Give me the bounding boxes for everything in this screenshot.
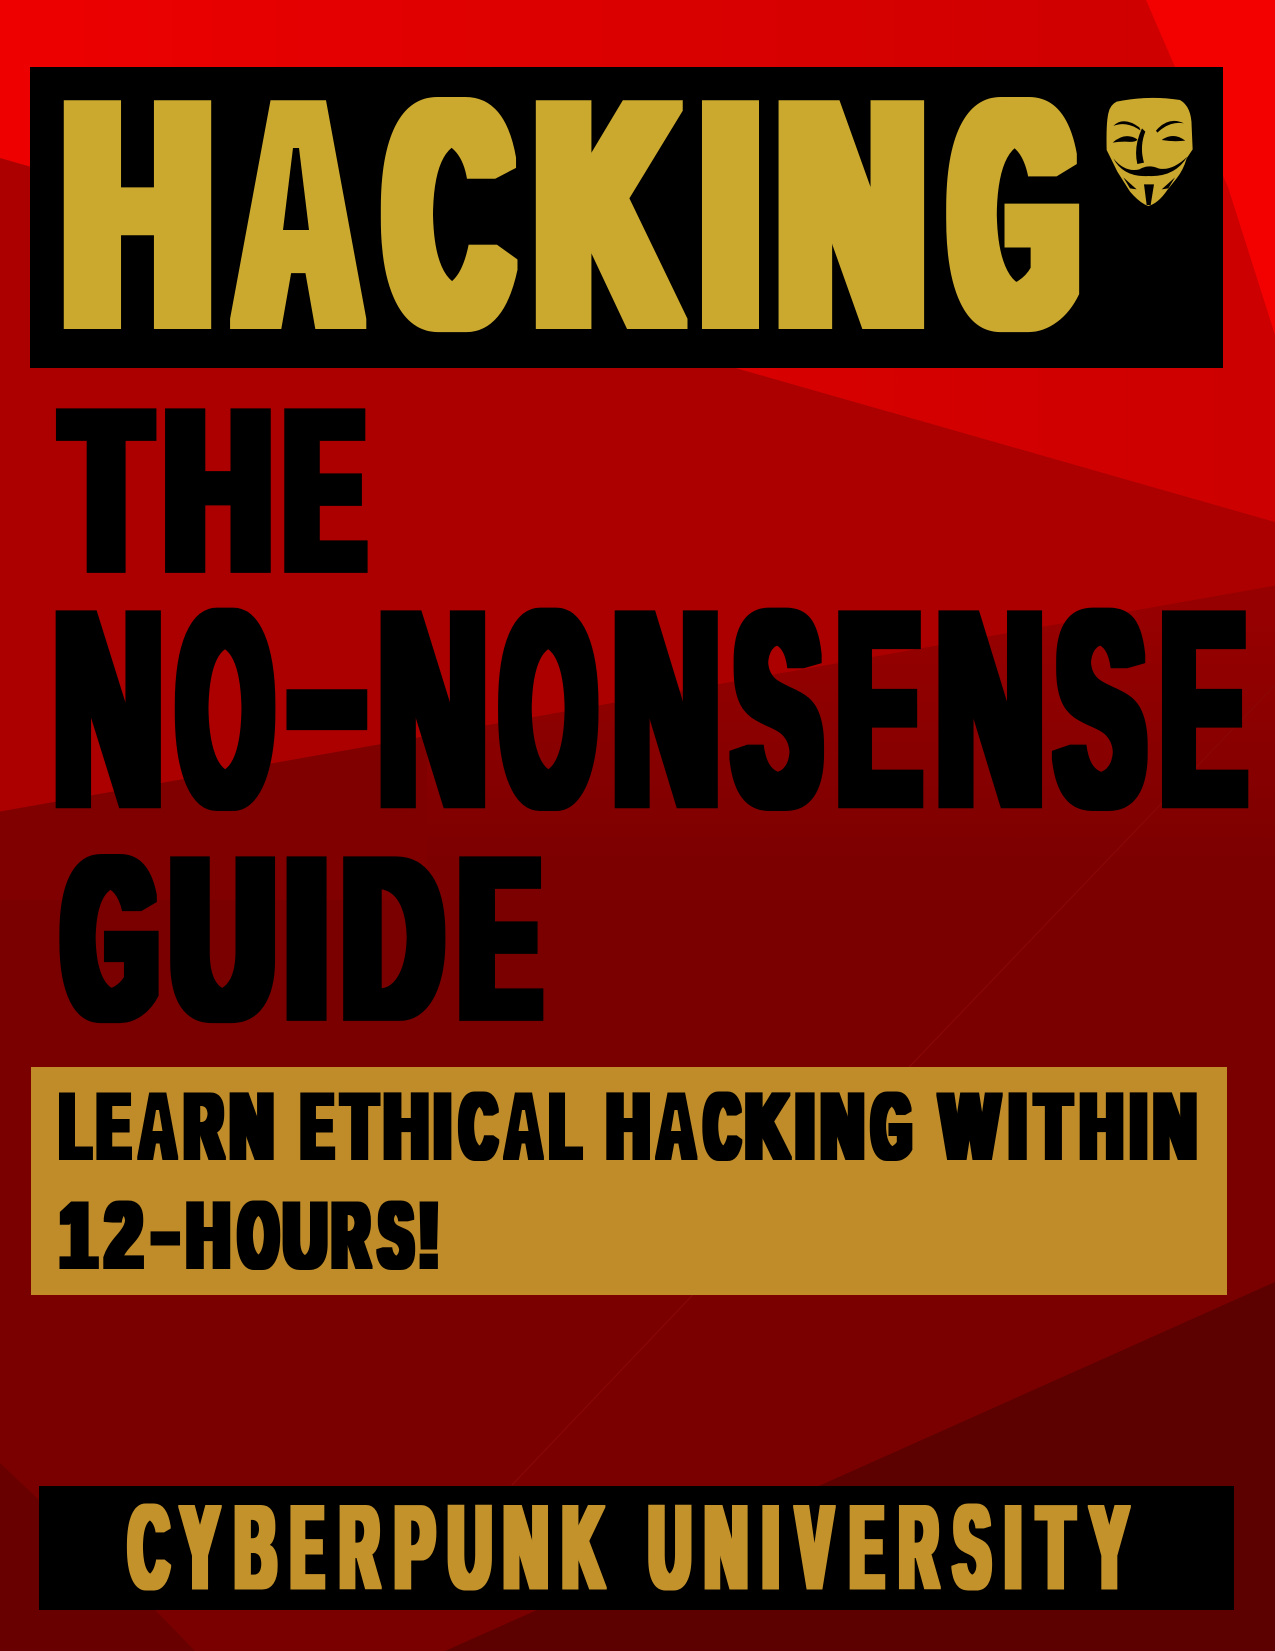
author name: U (448, 1480, 492, 1614)
author name: T (1038, 1480, 1074, 1614)
heading: GUIDE: E (461, 810, 538, 1066)
subtitle line 2: 2 (106, 1182, 142, 1288)
author name: I (762, 1480, 779, 1614)
title text: A (240, 37, 357, 392)
author name: V (797, 1480, 832, 1614)
title text: N (779, 37, 924, 392)
heading: GUIDE: D (344, 810, 442, 1066)
subtitle line 1: E (98, 1074, 129, 1178)
author name: S (954, 1480, 990, 1614)
title text: I (702, 37, 758, 392)
author name: N (503, 1480, 548, 1614)
author name: C (129, 1480, 169, 1614)
heading: GUIDE: G (64, 810, 156, 1066)
heading: THE: T (64, 362, 148, 618)
title text: K (537, 37, 675, 392)
subtitle line 1: I (1009, 1074, 1026, 1178)
subtitle line 1: H (607, 1074, 650, 1178)
subtitle line 1: H (384, 1074, 428, 1178)
subtitle line 1: T (1036, 1074, 1071, 1178)
subtitle line 1: I (434, 1074, 451, 1178)
author name: U (649, 1480, 691, 1614)
subtitle line 1: A (658, 1074, 694, 1178)
author name: R (899, 1480, 938, 1614)
subtitle line 1: C (705, 1074, 739, 1178)
heading: NO-NONSENSE: E (838, 555, 920, 863)
subtitle line 1: C (460, 1074, 496, 1178)
heading: NO-NONSENSE: N (378, 555, 487, 863)
heading: NO-NONSENSE: S (1056, 555, 1145, 863)
subtitle line 1: A (140, 1074, 175, 1178)
subtitle line 1: W (941, 1074, 998, 1178)
author name: R (340, 1480, 379, 1614)
author banner (39, 1480, 1234, 1614)
heading: NO-NONSENSE: N (936, 555, 1044, 863)
heading: GUIDE: U (171, 810, 274, 1066)
subtitle line 2: ! (418, 1182, 440, 1288)
author name: P (395, 1480, 434, 1614)
subtitle line 1: R (185, 1074, 223, 1178)
heading: THE: H (165, 362, 271, 618)
heading: NO-NONSENSE: S (734, 555, 821, 863)
subtitle line 2: - (152, 1178, 179, 1282)
subtitle line 1: L (60, 1074, 90, 1178)
subtitle line 1: L (550, 1074, 579, 1178)
author name: B (235, 1480, 276, 1614)
icon: Guy Fawkes mask (1107, 98, 1193, 206)
subtitle line 1: E (302, 1074, 332, 1178)
subtitle line 1: A (506, 1074, 541, 1178)
subtitle line 1: K (746, 1074, 788, 1178)
subtitle line 1: G (872, 1074, 911, 1178)
subtitle line 2: R (332, 1182, 369, 1288)
author name: N (705, 1480, 748, 1614)
subtitle line 1: I (1130, 1074, 1147, 1178)
author name: E (850, 1480, 883, 1614)
subtitle line 1: T (343, 1074, 377, 1178)
heading: NO-NONSENSE: O (178, 555, 272, 863)
heading: NO-NONSENSE: - (284, 532, 370, 840)
subtitle line 1: N (230, 1074, 273, 1178)
heading: THE: E (286, 362, 363, 618)
heading: NO-NONSENSE: N (613, 555, 720, 863)
heading: NO-NONSENSE: N (54, 555, 163, 863)
subtitle line 2: O (239, 1182, 278, 1288)
subtitle line 2: U (284, 1182, 327, 1288)
title text: C (388, 37, 508, 392)
heading: GUIDE: I (286, 810, 327, 1066)
title banner: HACKING: G (954, 37, 1075, 392)
subtitle line 2: H (187, 1182, 230, 1288)
subtitle line 2: S (379, 1182, 413, 1288)
title banner: HACKING (30, 37, 1223, 392)
author name: K (562, 1480, 603, 1614)
subtitle line 1: N (1154, 1074, 1196, 1178)
author name: Y (181, 1480, 219, 1614)
author banner: Y (1091, 1480, 1128, 1614)
subtitle line 2: 1 (60, 1182, 96, 1288)
heading: NO-NONSENSE: O (501, 555, 596, 863)
subtitle line 1: I (795, 1074, 815, 1178)
subtitle panel (31, 1067, 1227, 1295)
author name: I (1005, 1480, 1022, 1614)
title text: H (64, 37, 211, 392)
subtitle line 1: N (821, 1074, 864, 1178)
subtitle line 1: H (1080, 1074, 1123, 1178)
author name: E (291, 1480, 323, 1614)
